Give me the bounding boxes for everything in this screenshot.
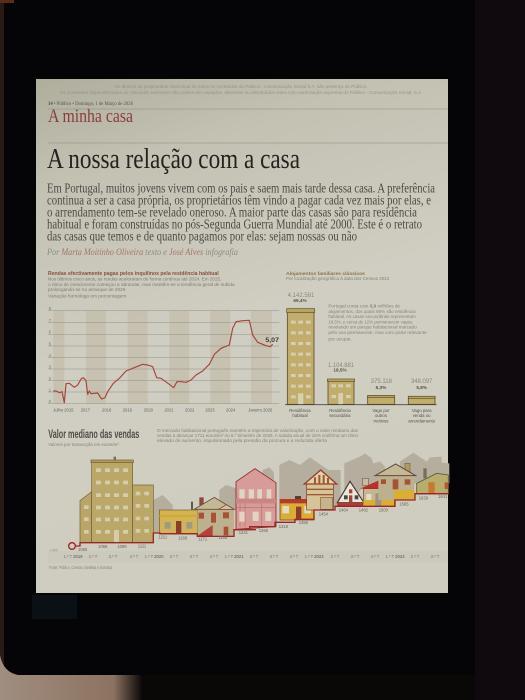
dwellings heading: Alojamentos familiares clássicos	[286, 271, 365, 277]
yellow cottage	[280, 496, 314, 520]
y axis labels: 6	[49, 330, 52, 335]
step values right	[259, 494, 448, 533]
dwellings subheading: Por localização geográfica à data dos Censos 2021	[286, 276, 390, 281]
intro paragraph: das casas que temos e de quanto pagamos por elas: sejam nossas ou não	[47, 229, 357, 244]
step values right: 1500	[379, 507, 389, 512]
background silhouettes	[153, 485, 236, 533]
y axis labels: 7	[49, 318, 52, 323]
sales paragraph: vendas a alcançar 1711 euros/m² no 5.º trimestre de 2025. A subida anual de 16% confirma um ritmo	[157, 433, 358, 438]
olive house	[417, 468, 448, 494]
step values right: 1565	[399, 501, 409, 506]
intro paragraph	[47, 181, 435, 244]
x axis labels: 2017	[81, 408, 91, 413]
yellow house	[159, 510, 197, 534]
subheading: median sale value: Valores por transacção em euros/m²	[48, 442, 119, 447]
panel: house price skyline left	[49, 457, 256, 552]
x axis labels: 2022	[185, 408, 195, 413]
timeline: 4.º T	[210, 554, 219, 559]
intro paragraph: habitual e foram construídas no pós-Segunda Guerra Mundial até 2000. Este é o retrato	[47, 217, 422, 232]
dwellings paragraph	[328, 304, 427, 342]
timeline: 3.º T	[431, 554, 440, 559]
value labels: 375.118	[371, 378, 392, 385]
page folio: 14 • Público • Domingo, 1 de Março de 2026	[48, 102, 133, 107]
intro paragraph: o arrendamento tem-se revelado oneroso. A maior parte das casas são para residência	[47, 205, 417, 220]
panel: magazine page	[36, 79, 448, 593]
step values left: 1098	[98, 544, 108, 549]
value labels	[288, 292, 433, 385]
timeline: 1.º T 2019	[63, 554, 83, 559]
y axis labels: 0	[49, 399, 52, 404]
category labels	[289, 408, 436, 423]
step values right: 1641	[438, 494, 448, 499]
panel: dwellings by type	[285, 271, 437, 423]
copyright notice: Os direitos de propriedade intelectual de todos os conteúdos do Público - Comunicação Social S.A. são pertença do Público.	[114, 84, 368, 89]
red roof house	[360, 478, 397, 506]
category labels: Residência	[329, 408, 351, 413]
timeline	[48, 551, 448, 563]
background silhouettes	[263, 453, 449, 507]
y axis labels: 5	[49, 341, 52, 346]
tall building	[287, 309, 315, 404]
timeline: 2.º T	[170, 554, 179, 559]
x axis labels: Julho 2015	[53, 408, 74, 413]
percentage labels	[293, 298, 428, 390]
step values right: 1268	[259, 528, 269, 533]
timeline: 1.º T 2023	[385, 554, 405, 559]
step values left: 1099	[117, 544, 127, 549]
timeline: 3.º T	[351, 554, 360, 559]
dwellings paragraph: pelo uso permanente, mas com parte relevante	[328, 330, 427, 335]
price step line left	[75, 530, 256, 546]
wooden chalet	[304, 470, 337, 510]
copyright notice	[60, 84, 422, 95]
timeline: 1.º T 2022	[304, 554, 324, 559]
category labels: habitual	[292, 413, 308, 418]
heading: median sale value: Valor mediano das vendas	[48, 429, 139, 441]
timeline: 3.º T	[109, 554, 118, 559]
percentage labels: 5,8%	[416, 385, 428, 390]
dwellings paragraph: alojamentos, dos quais 69% são residência	[328, 309, 416, 314]
timeline: 1.º T 2020	[144, 554, 164, 559]
percentage labels: 18,5%	[333, 368, 347, 373]
vacant other	[368, 396, 395, 404]
step values right: 1454	[319, 511, 329, 516]
start marker	[69, 543, 75, 549]
x axis labels: 2020	[144, 408, 154, 413]
y axis labels: 8	[49, 306, 52, 311]
section rules	[48, 109, 448, 143]
intro paragraph: continua a ser a casa própria, os proprietários têm vindo a pagar cada vez mais por elas, e	[47, 193, 431, 208]
step values left: 1111	[138, 543, 147, 548]
sales paragraph	[157, 428, 359, 443]
step values right: 1629	[419, 495, 429, 500]
x axis labels: 2023	[205, 408, 215, 413]
timeline: 4.º T	[290, 554, 299, 559]
y axis labels: 4	[49, 353, 52, 358]
ground line	[285, 403, 437, 406]
timeline: 3.º T	[270, 554, 279, 559]
percentage labels: 69,4%	[293, 298, 307, 303]
chart description: prolongando-se no arranque de 2026.	[48, 287, 127, 292]
x axis labels: Janeiro 2026	[248, 408, 273, 413]
dwellings paragraph: habitual. As casas secundárias representam	[328, 314, 416, 319]
chart description: Nos últimos cinco anos, as rendas aceleraram de forma contínua até 2024. Em 2025,	[48, 276, 221, 281]
timeline: 1.º T 2021	[224, 554, 244, 559]
x axis labels: 2024	[226, 408, 236, 413]
second homes building	[327, 379, 355, 404]
x axis labels	[53, 408, 273, 413]
category labels: arrendamento	[408, 418, 436, 423]
y axis labels: 1	[49, 387, 52, 392]
panel: house price skyline right	[233, 453, 449, 533]
year bands	[53, 311, 272, 404]
step values left: 1188	[218, 535, 228, 540]
value labels: 4.142.581	[288, 292, 315, 299]
dwellings paragraph: por ocupar.	[328, 337, 352, 342]
chart description: Variação homóloga em percentagem	[48, 294, 126, 299]
main title: A nossa relação com a casa	[47, 144, 300, 175]
timeline: 4.º T	[371, 554, 380, 559]
timeline: 4.º T	[130, 554, 139, 559]
chart description: o ritmo de crescimento começou a abrandar, mas mantêm-se a tendência geral de subida	[48, 282, 235, 287]
vacant for sale or rent	[408, 396, 435, 404]
value labels: 1.104.881	[328, 362, 354, 369]
a-frame house	[337, 481, 364, 506]
category labels: Vago por	[372, 408, 390, 413]
dwellings paragraph: revelando um parque habitacional marcado	[328, 325, 417, 330]
step values right: 1318	[279, 524, 289, 529]
timeline: 2.º T	[250, 554, 259, 559]
step values left: 1065	[78, 547, 88, 552]
chart heading: Rendas efectivamente pagas pelos inquilinos pela residência habitual	[48, 271, 219, 277]
timeline: 2.º T	[411, 554, 420, 559]
timeline: 3.º T	[190, 554, 199, 559]
pink house	[236, 469, 276, 529]
category labels: secundária	[329, 413, 351, 418]
sales paragraph: elevado de aumento, impulsionado pela pressão da procura e a reduzida oferta	[157, 438, 327, 443]
category labels: motivos	[374, 418, 388, 423]
timeline: 2.º T	[89, 554, 98, 559]
price step line right	[233, 494, 448, 530]
category labels: outros	[375, 413, 387, 418]
y axis labels: 3	[49, 364, 52, 369]
grid lines	[48, 311, 279, 404]
step values left: 1211	[158, 535, 168, 540]
x axis labels: 2018	[102, 408, 112, 413]
percentage labels: 6,3%	[376, 385, 387, 390]
value labels: 348.097	[411, 378, 433, 385]
dwellings paragraph: 18,5%, e cerca de 12% permanecem vagas,	[328, 319, 413, 324]
chart description	[48, 276, 235, 299]
byline: Por Marta Moitinho Oliveira texto e José Alves infografia	[46, 247, 238, 258]
step values right: 1464	[339, 507, 349, 512]
source note: Fonte: Público, Censos, Idealista e Eurostat	[49, 565, 113, 570]
y axis labels: 2	[49, 376, 52, 381]
step values left: 1171	[198, 537, 208, 542]
rent line	[53, 320, 273, 403]
gabled grey house	[375, 463, 416, 500]
y axis labels	[49, 306, 52, 404]
step values left: 1169	[178, 535, 188, 540]
step values left: 1241	[239, 530, 249, 535]
step values right: 1355	[299, 520, 309, 525]
sales paragraph: O mercado habitacional português mantém a trajectória de valorização, com o valor mediano das	[157, 428, 359, 433]
dwellings paragraph: Portugal conta com 5,9 milhões de	[328, 304, 401, 309]
category labels: Residência	[289, 408, 311, 413]
apartment block	[80, 457, 153, 543]
intro paragraph: Em Portugal, muitos jovens vivem com os pais e saem mais tarde dessa casa. A preferência	[47, 181, 435, 196]
category labels: venda ou	[413, 413, 431, 418]
category labels: Vago para	[412, 408, 432, 413]
timeline: 2.º T	[331, 554, 340, 559]
latest value: 5,07	[265, 338, 280, 344]
x axis labels: 2019	[123, 408, 133, 413]
section title: A minha casa	[48, 106, 133, 127]
grey house with red stairs	[191, 497, 234, 536]
step values right: 1482	[359, 507, 369, 512]
copyright notice: Os conteúdos disponibilizados ao Utilizador assinante não podem ser copiados, alterados ou distribuídos salvo com autorização expressa do Público - Comunicação Social, S.A.	[60, 90, 422, 95]
step values left	[78, 530, 249, 552]
x axis labels: 2021	[164, 408, 174, 413]
panel: rents line chart	[48, 271, 280, 413]
axis value: 1.000	[49, 548, 58, 552]
